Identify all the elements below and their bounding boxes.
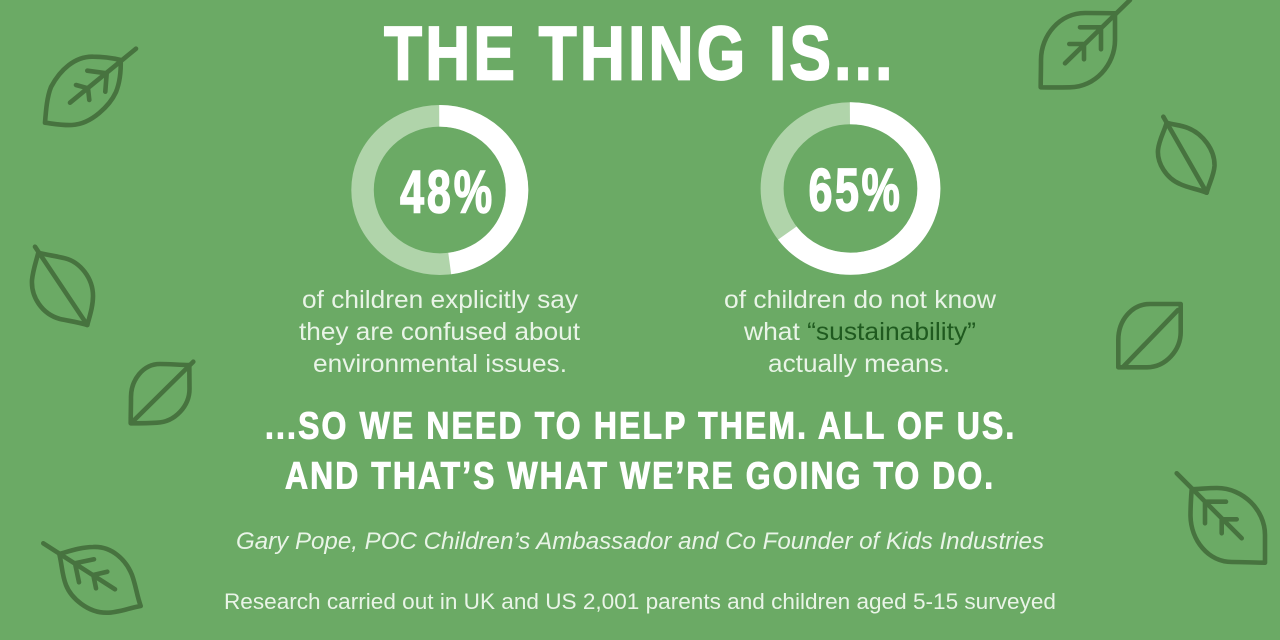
donut chart: 65% [772,113,929,264]
attribution: Gary Pope, POC Children’s Ambassador and Co Founder of Kids Industries [236,528,1044,555]
stat description: environmental issues. [313,350,567,378]
icon: leaf lower left [131,362,193,423]
donut chart: 48% [363,116,517,264]
panel: 65% statistic [724,113,997,378]
panel: 48% statistic [299,116,580,378]
icon: leaf left middle [32,247,93,325]
icon: leaf right middle [1118,304,1181,367]
icon: leaf bottom right [1177,473,1265,563]
headline message: ...SO WE NEED TO HELP THEM. ALL OF US. [265,405,1014,447]
stat description: of children explicitly say [302,286,579,314]
stat value: 65%: 65% [808,158,900,224]
stat description: what “sustainability” [743,318,976,346]
stat description [724,286,997,378]
icon: leaf top left [45,49,136,125]
headline message: AND THAT’S WHAT WE’RE GOING TO DO. [285,455,993,497]
stat description: they are confused about [299,318,580,346]
headline message [265,405,1014,497]
stat value: 48%: 48% [400,160,492,226]
title: THE THING IS... [384,11,892,96]
icon: leaf top right [1041,0,1130,87]
research note: Research carried out in UK and US 2,001 parents and children aged 5-15 surveyed [224,589,1056,614]
stat description [299,286,580,378]
stat description: actually means. [768,350,950,378]
stat description: of children do not know [724,286,997,314]
icon: leaf right upper [1158,117,1215,193]
icon: leaf bottom left [43,543,141,613]
